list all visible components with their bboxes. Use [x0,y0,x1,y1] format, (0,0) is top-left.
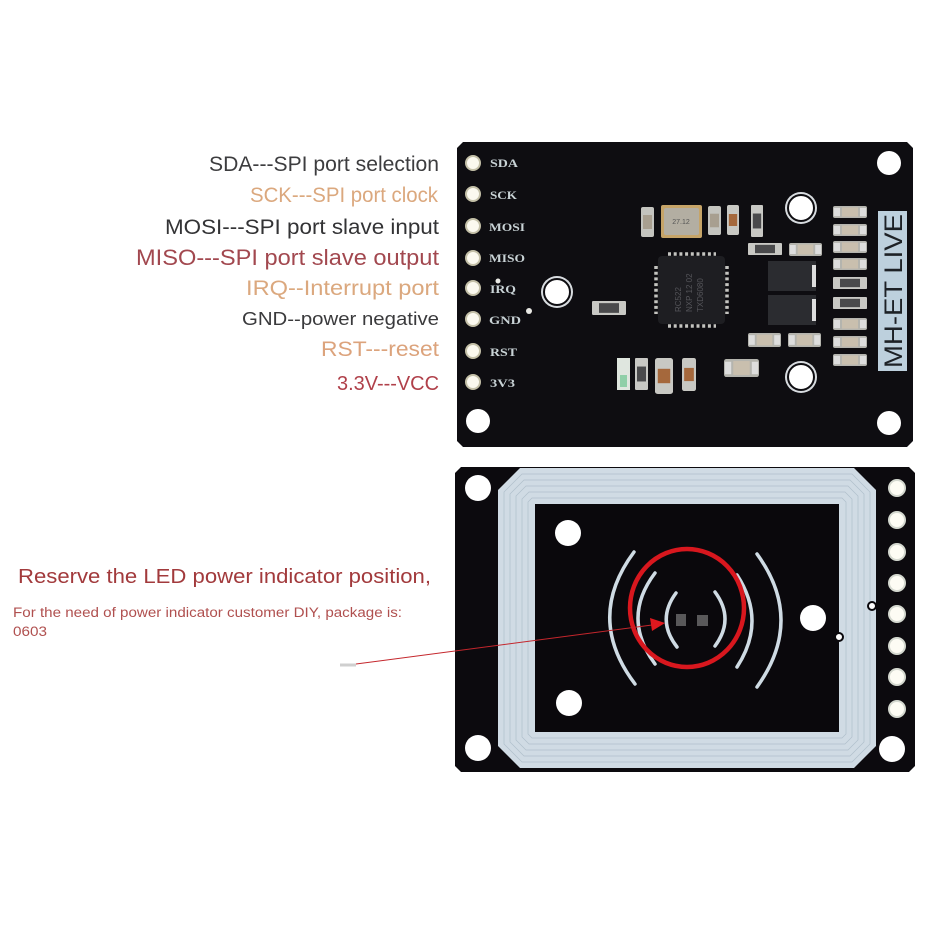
LED note body: For the need of power indicator customer DIY, package is: [13,605,402,620]
PCB front side [457,142,913,447]
back mounting holes [465,475,905,762]
LED note body: 0603 [13,624,47,639]
top passive components [641,205,822,256]
label: MISO: MISO---SPI port slave output [136,245,439,270]
pin description list [136,153,439,395]
PCB back side [455,467,915,772]
signal arcs [610,552,781,687]
silkscreen pin names: SDA [490,156,518,170]
LED note heading: Reserve the LED power indicator position, [18,566,431,588]
vias [496,278,532,314]
ringed mounting holes [541,192,817,393]
diodes [768,261,816,325]
right passive column [833,206,867,366]
silkscreen pin names [489,156,525,390]
label: MOSI: MOSI---SPI port slave input [165,216,439,239]
silkscreen pin names: MISO [489,251,525,265]
back header pads [889,480,905,717]
arrow to LED position [340,618,665,665]
silkscreen pin names: RST [490,345,517,359]
silkscreen pin names: SCK [490,188,518,202]
label: IRQ: IRQ--Interrupt port [246,277,439,300]
LED footprint pads [676,614,708,626]
silkscreen pin names: GND [489,313,521,327]
silkscreen pin names: 3V3 [490,376,515,390]
power LED [617,358,630,390]
back board outline [455,467,915,772]
RC522 chip: RC522 [674,287,683,312]
LED note body [13,605,402,639]
front board outline [457,142,913,447]
red highlight circle [630,549,744,667]
MH-ET LIVE label: MH-ET LIVE [880,214,908,368]
RC522 chip: NXP 12 02 [685,273,694,312]
coil vias [835,602,876,641]
lower passive components [592,301,821,394]
silkscreen pin names: MOSI [489,220,525,234]
label: GND: GND--power negative [242,309,439,329]
label: 3.3V: 3.3V---VCC [337,373,439,395]
label: RST: RST---reset [321,338,439,361]
RC522 chip [656,254,727,326]
corner mounting holes [466,151,901,435]
header pads [466,156,480,389]
label: SDA: SDA---SPI port selection [209,153,439,176]
RC522 chip: TXD6080 [696,278,705,312]
crystal: 27.12 [672,219,690,226]
antenna coil [498,468,876,768]
silkscreen pin names: IRQ [490,282,516,296]
label: SCK: SCK---SPI port clock [250,184,438,207]
crystal [661,205,702,238]
